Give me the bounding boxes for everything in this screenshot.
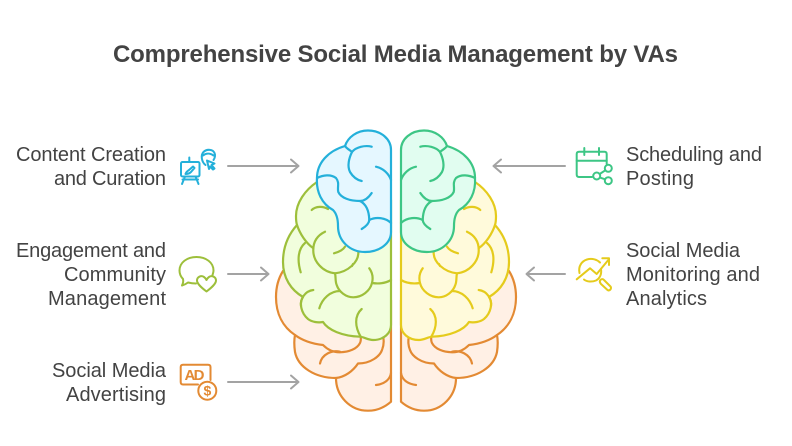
label: social media advertising [52, 360, 167, 406]
left lobe: green [283, 180, 391, 340]
label: social media advertising: Advertising [66, 384, 166, 406]
label: engagement and community management [16, 240, 166, 310]
label: engagement and community management: Community [64, 264, 166, 286]
left lobe: blue [317, 130, 391, 252]
label: social media monitoring and analytics: Monitoring and [626, 264, 760, 286]
label: scheduling and posting [626, 144, 762, 190]
right lobe: orange [401, 271, 516, 411]
icon: magnifier with trend arrow [577, 258, 611, 290]
arrow: monitoring to brain [526, 268, 565, 280]
label: scheduling and posting: Posting [626, 168, 694, 190]
arrow: scheduling to brain [494, 160, 565, 172]
label: content creation and curation: Content Creation [16, 144, 166, 166]
label: social media advertising: Social Media [52, 360, 167, 382]
arrow: engagement to brain [228, 268, 268, 280]
label: content creation and curation: and Curation [54, 168, 166, 190]
label: scheduling and posting: Scheduling and [626, 144, 762, 166]
label: social media monitoring and analytics [626, 240, 760, 310]
icon: speech bubble and heart [180, 257, 216, 292]
label: social media monitoring and analytics: Analytics [626, 288, 707, 310]
icon: AD and dollar coin: $ [204, 382, 212, 398]
right lobe: teal [401, 130, 475, 252]
label: engagement and community management: Engagement and [16, 240, 166, 262]
arrow: content creation to brain [228, 160, 298, 172]
title: Comprehensive Social Media Management by VAs [113, 41, 678, 68]
arrow: advertising to brain [228, 376, 298, 388]
label: content creation and curation [16, 144, 166, 190]
right lobe: yellow [401, 180, 509, 340]
icon: easel and cursor [181, 150, 215, 184]
left lobe: orange [276, 271, 391, 411]
brain illustration [276, 130, 516, 411]
icon: calendar and share [577, 148, 612, 184]
icon: AD and dollar coin [181, 365, 216, 400]
label: engagement and community management: Management [48, 288, 166, 310]
label: social media monitoring and analytics: Social Media [626, 240, 741, 262]
icon: AD and dollar coin: AD [184, 367, 205, 384]
